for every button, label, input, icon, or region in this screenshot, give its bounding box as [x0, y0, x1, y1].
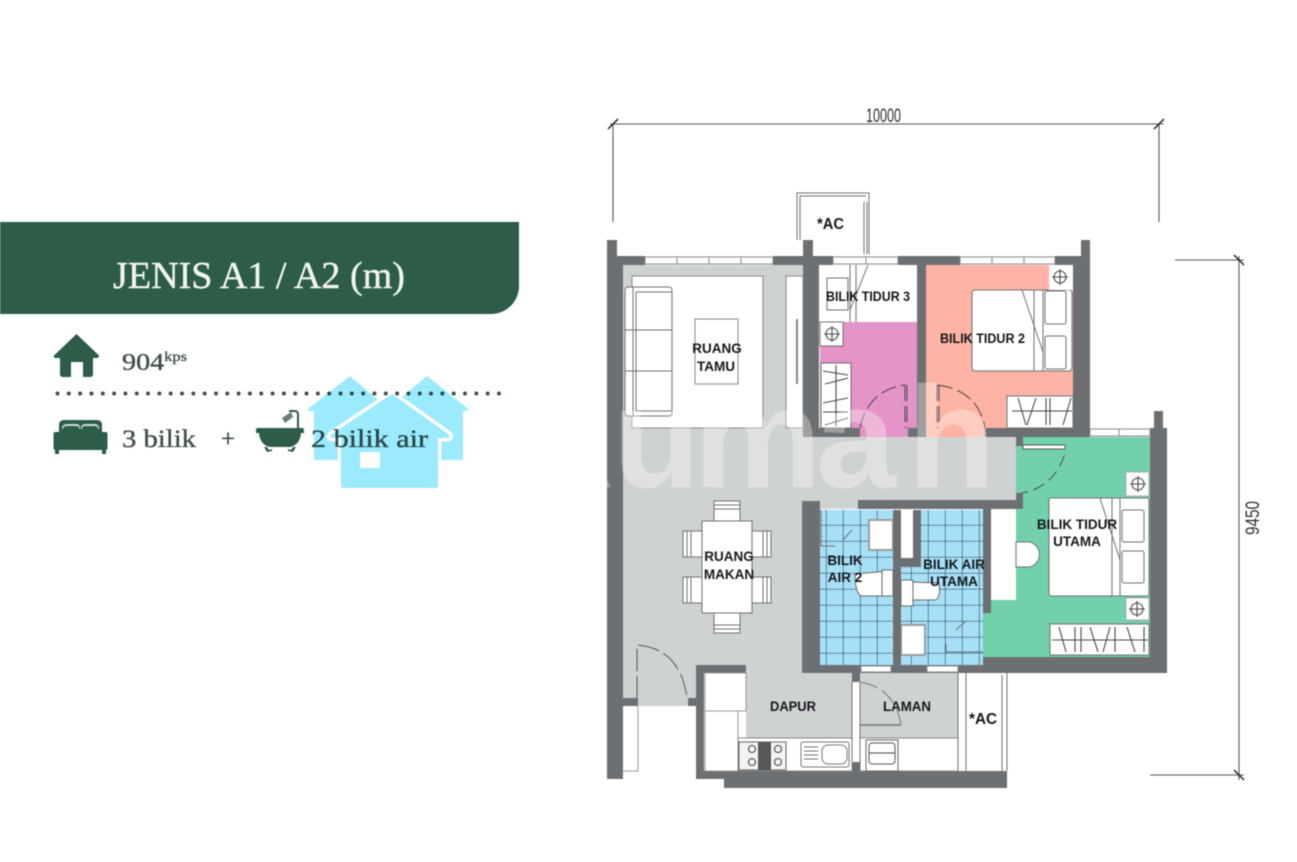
- dimension: depth 9450: 9450: [1243, 501, 1264, 535]
- sink: [801, 742, 849, 767]
- windows: [645, 257, 1150, 672]
- label: dining room: MAKAN: [704, 567, 754, 582]
- room: bilik air 2: [820, 510, 893, 665]
- room: bilik tidur 2: [926, 265, 1073, 437]
- floor plan: [607, 193, 1167, 788]
- text: plus sign: +: [221, 426, 235, 453]
- panel: title banner: [0, 222, 519, 314]
- store and entrance area: [623, 673, 746, 779]
- label: bedroom 2: BILIK TIDUR 2: [940, 331, 1025, 346]
- stove: [739, 742, 786, 770]
- kitchen counter: [738, 738, 852, 771]
- label: master bedroom: BILIK TIDUR: [1037, 517, 1117, 532]
- room: bilik tidur utama: [983, 437, 1150, 657]
- walls: [607, 240, 1167, 788]
- bed: [972, 290, 1072, 371]
- label: bedroom 3: BILIK TIDUR 3: [826, 289, 910, 304]
- wardrobe: [1007, 396, 1073, 428]
- label: master bathroom: UTAMA: [930, 574, 978, 589]
- label: bathroom 2: AIR 2: [828, 570, 862, 585]
- room: bilik tidur 3: [820, 265, 917, 437]
- room labels: [692, 216, 1117, 728]
- furniture: living room rug, sofa, table and cabinet: [625, 276, 803, 428]
- label: kitchen: DAPUR: [770, 699, 816, 714]
- laman and AC ledge: [852, 673, 1007, 771]
- label: bathroom 2: BILIK: [827, 553, 863, 568]
- label: yard: LAMAN: [883, 699, 931, 714]
- floor: living, dining, corridor and kitchen: [623, 265, 1016, 738]
- fan point: [820, 322, 843, 346]
- label: living room: TAMU: [697, 359, 735, 374]
- label: master bathroom: BILIK AIR: [923, 557, 985, 572]
- wardrobe: [821, 363, 851, 428]
- label: master bedroom: UTAMA: [1053, 534, 1101, 549]
- icon: bathtub: [256, 410, 304, 452]
- label: dining room: RUANG: [704, 549, 754, 564]
- door: [1016, 445, 1066, 494]
- washing machine: [866, 740, 898, 771]
- furniture: dining set: [683, 501, 771, 633]
- text: bedrooms: 3 bilik: [122, 426, 197, 453]
- label: living room: RUANG: [692, 341, 742, 356]
- door arcs of bedrooms: [860, 385, 985, 428]
- floor: laman: [860, 673, 958, 738]
- text: built-up area: 904: [122, 350, 158, 376]
- text: built-up area: kps: [164, 350, 187, 365]
- watermark text: Rumah: [510, 357, 995, 518]
- icon: watermark houses: [308, 376, 468, 488]
- text: bathrooms: 2 bilik air: [311, 426, 429, 453]
- fan points: [1126, 472, 1149, 620]
- fan point: [1049, 265, 1073, 290]
- dimension: width 10000: 10000: [866, 106, 901, 127]
- bed: [1049, 498, 1149, 596]
- label: air-conditioner bottom: *AC: [969, 711, 997, 728]
- divider: dotted line: [58, 392, 505, 396]
- label: air-conditioner top: *AC: [817, 216, 844, 233]
- entrance door: [637, 645, 687, 698]
- icon: bed: [54, 420, 108, 454]
- AC ledge top: [797, 193, 869, 254]
- dimension: width 10000: [608, 106, 1164, 222]
- dimension: depth 9450: [1150, 255, 1264, 780]
- room: bilik air utama: [901, 510, 983, 665]
- icon: house: [54, 334, 99, 377]
- wardrobe: [1050, 624, 1149, 655]
- title: JENIS A1 / A2 (m): [113, 255, 405, 297]
